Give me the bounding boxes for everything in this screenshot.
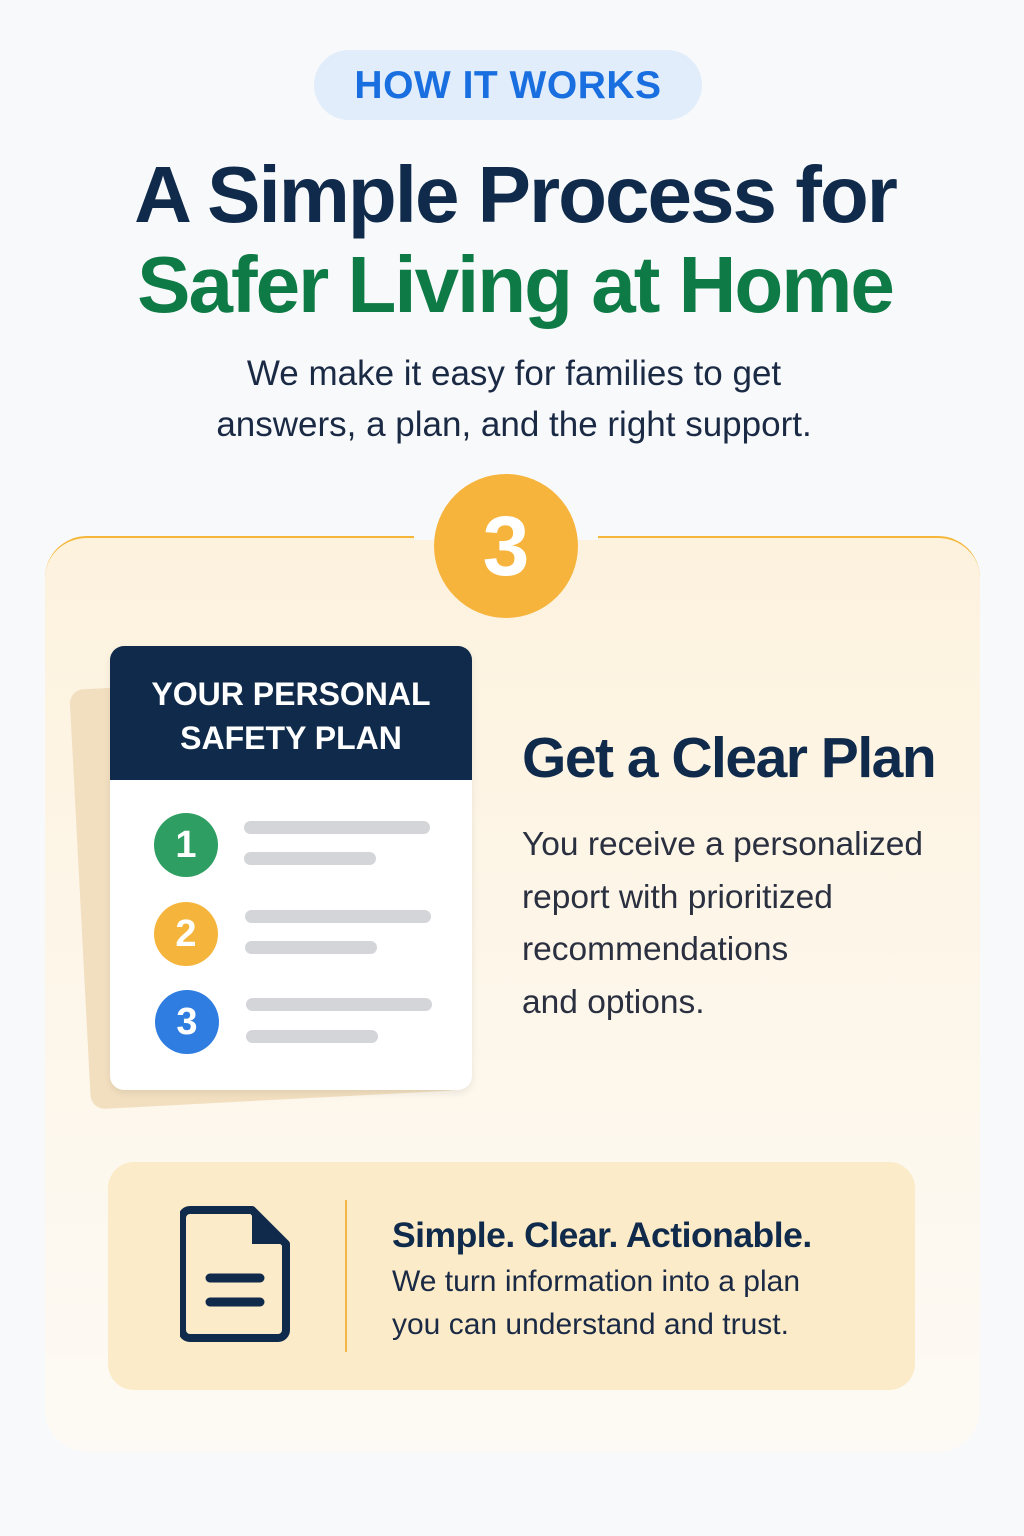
callout text: We turn information into a plan (392, 1265, 800, 1298)
number badge 3 (414, 528, 598, 540)
icon: document (180, 1206, 290, 1342)
body text: recommendations (522, 931, 788, 968)
subtitle: We make it easy for families to get (247, 354, 781, 393)
title: Safer Living at Home (137, 240, 893, 329)
item 1 (154, 813, 218, 877)
title: A Simple Process for (134, 150, 896, 239)
body text: report with prioritized (522, 878, 833, 916)
item 1: 1 (175, 824, 197, 866)
callout text: you can understand and trust. (392, 1308, 789, 1341)
subtitle (216, 354, 812, 444)
item 3: 3 (176, 1001, 198, 1043)
item 3 (155, 990, 219, 1054)
pill: how it works: HOW IT WORKS (354, 64, 662, 107)
text: 3 (483, 499, 529, 593)
panel: step 3 (45, 536, 980, 1452)
title (134, 150, 897, 329)
pill: how it works (314, 50, 702, 120)
subtitle: answers, a plan, and the right support. (216, 405, 812, 444)
body text (522, 826, 923, 1020)
body text: You receive a personalized (522, 826, 923, 863)
card header: YOUR PERSONAL (151, 676, 431, 712)
body text: and options. (522, 984, 705, 1020)
item 2 (154, 902, 218, 966)
card header: SAFETY PLAN (180, 720, 402, 756)
callout text: Simple. Clear. Actionable. (392, 1215, 812, 1255)
heading: get a clear plan: Get a Clear Plan (522, 726, 935, 790)
item 2: 2 (175, 913, 197, 955)
callout box (108, 1162, 915, 1390)
document card: personal safety plan (70, 646, 472, 1109)
callout text (392, 1215, 812, 1341)
card header (110, 646, 472, 780)
